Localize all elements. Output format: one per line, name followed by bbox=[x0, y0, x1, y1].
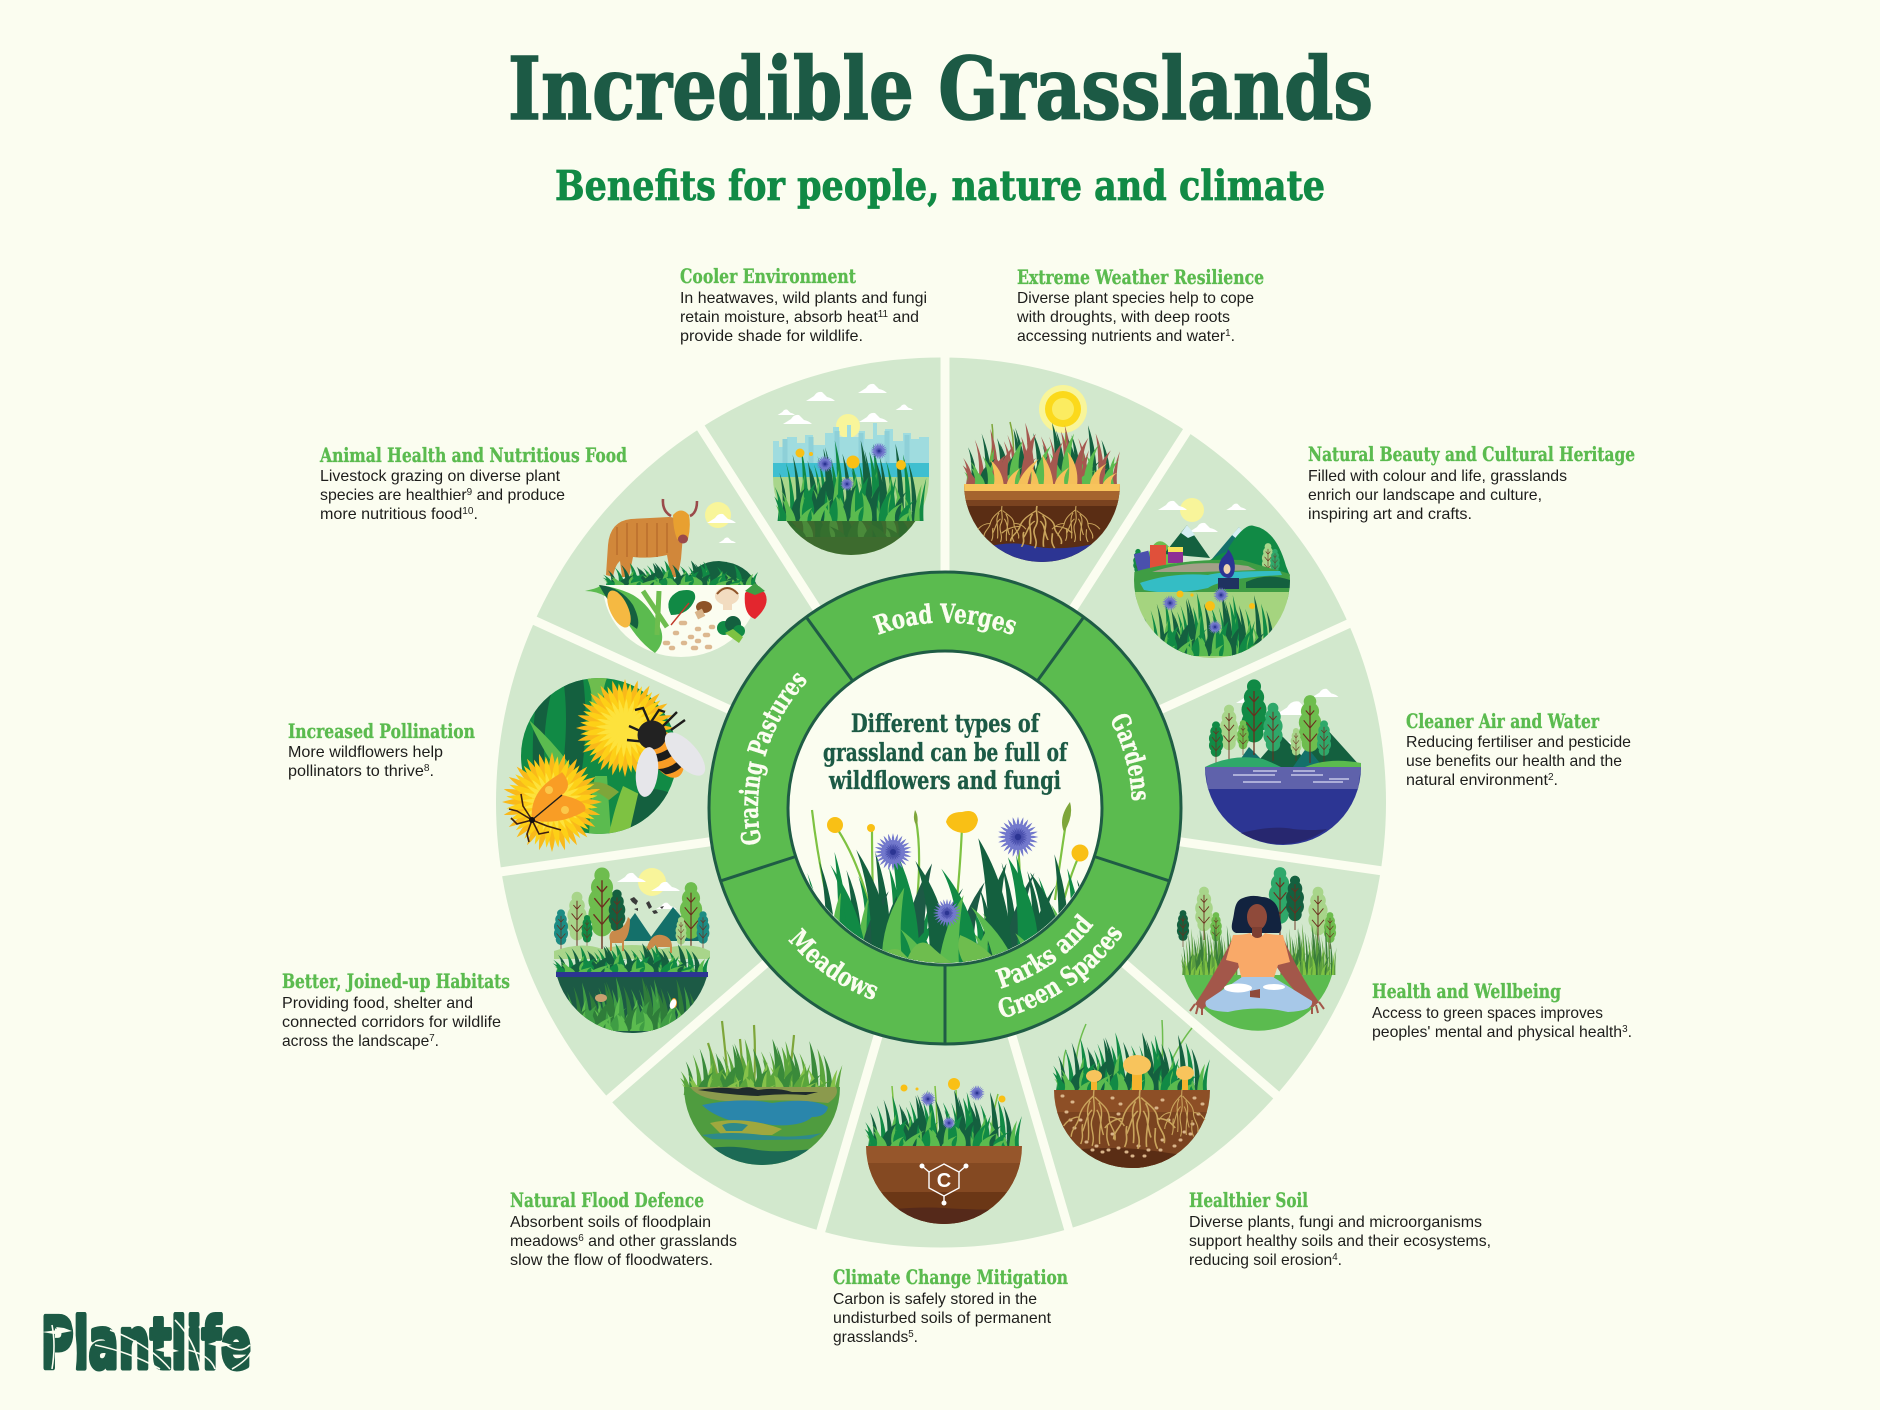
ring label: parks and green spaces: Parks and bbox=[994, 913, 1094, 989]
text: climate change mitigation: undisturbed soils of permanent bbox=[833, 1310, 1052, 1327]
text: increased pollination bbox=[288, 719, 475, 780]
text: healthier soil: Diverse plants, fungi and microorganisms bbox=[1189, 1214, 1482, 1231]
text: extreme weather resilience: . bbox=[1231, 328, 1235, 345]
text: better joined-up habitats: Providing food, shelter and bbox=[282, 995, 473, 1012]
text: natural beauty and cultural heritage: Filled with colour and life, grasslands bbox=[1308, 468, 1567, 485]
text: health and wellbeing: Access to green spaces improves bbox=[1372, 1005, 1603, 1022]
title: Incredible Grasslands bbox=[508, 39, 1373, 140]
text: natural flood defence: Absorbent soils of floodplain bbox=[510, 1214, 711, 1231]
text: healthier soil: . bbox=[1338, 1252, 1342, 1269]
text: extreme weather resilience: Extreme Weather Resilience bbox=[1017, 265, 1264, 289]
text: climate change mitigation: 5 bbox=[908, 1329, 914, 1340]
icon: extreme weather resilience bbox=[963, 385, 1120, 564]
text: increased pollination: Increased Pollination bbox=[288, 719, 475, 743]
icon: natural flood defence bbox=[680, 1021, 842, 1167]
text: better joined-up habitats bbox=[282, 969, 510, 1050]
text: animal health and nutritious food: 9 bbox=[467, 487, 473, 498]
centre text: grassland can be full of bbox=[823, 738, 1069, 767]
text: natural beauty and cultural heritage: inspiring art and crafts. bbox=[1308, 506, 1472, 523]
text: extreme weather resilience: accessing nutrients and water bbox=[1017, 328, 1229, 345]
wheel: outer benefit wedges bbox=[480, 338, 1410, 1259]
text: health and wellbeing: . bbox=[1628, 1024, 1632, 1041]
text: cleaner air and water: natural environment bbox=[1406, 772, 1547, 789]
text: cleaner air and water: 2 bbox=[1548, 772, 1554, 783]
icon: natural beauty and cultural heritage bbox=[1133, 498, 1290, 662]
text: better joined-up habitats: across the landscape bbox=[282, 1033, 433, 1050]
text: animal health and nutritious food: and produce bbox=[472, 487, 565, 504]
text: better joined-up habitats: connected corridors for wildlife bbox=[282, 1014, 501, 1031]
text: increased pollination: . bbox=[429, 763, 434, 780]
text: animal health and nutritious food: Animal Health and Nutritious Food bbox=[319, 443, 627, 467]
text: natural flood defence: and other grasslands bbox=[584, 1233, 737, 1250]
text: animal health and nutritious food bbox=[319, 443, 627, 523]
text: natural beauty and cultural heritage bbox=[1308, 442, 1635, 523]
text: natural flood defence: slow the flow of floodwaters. bbox=[510, 1252, 713, 1269]
text: cooler environment: 11 bbox=[878, 309, 889, 320]
centre ring: grassland types bbox=[708, 570, 1182, 1046]
text: animal health and nutritious food: more nutritious food bbox=[320, 506, 461, 523]
text: extreme weather resilience: with droughts, with deep roots bbox=[1016, 309, 1230, 326]
centre text: Different types of bbox=[851, 709, 1041, 738]
text: extreme weather resilience: Diverse plant species help to cope bbox=[1017, 290, 1254, 307]
text: health and wellbeing: Health and Wellbeing bbox=[1372, 979, 1561, 1003]
text: cleaner air and water: . bbox=[1554, 772, 1558, 789]
text: healthier soil: 4 bbox=[1332, 1252, 1338, 1263]
text: animal health and nutritious food: 10 bbox=[462, 506, 474, 517]
centre circle with plants bbox=[786, 651, 1107, 975]
logo: Plantlife: Plantlife bbox=[41, 1303, 251, 1385]
text: climate change mitigation: Climate Change Mitigation bbox=[833, 1265, 1068, 1289]
text: natural beauty and cultural heritage: Natural Beauty and Cultural Heritage bbox=[1308, 442, 1635, 466]
text: better joined-up habitats: . bbox=[435, 1033, 439, 1050]
subtitle: Benefits for people, nature and climate bbox=[555, 162, 1325, 210]
text: cooler environment bbox=[680, 264, 927, 345]
text: animal health and nutritious food: Livestock grazing on diverse plant bbox=[320, 468, 561, 485]
logo: Plantlife bbox=[41, 1303, 252, 1385]
text: healthier soil: support healthy soils and their ecosystems, bbox=[1189, 1233, 1491, 1250]
text: increased pollination: 8 bbox=[424, 763, 430, 774]
text: health and wellbeing bbox=[1372, 979, 1632, 1041]
text: health and wellbeing: 3 bbox=[1622, 1024, 1628, 1035]
text: cleaner air and water bbox=[1406, 709, 1631, 789]
centre text bbox=[823, 709, 1069, 795]
icon: climate change mitigation: C bbox=[937, 1170, 951, 1192]
text: cleaner air and water: use benefits our health and the bbox=[1406, 753, 1622, 770]
text: natural beauty and cultural heritage: enrich our landscape and culture, bbox=[1308, 487, 1542, 504]
text: natural flood defence: meadows bbox=[510, 1233, 578, 1250]
text: increased pollination: pollinators to thrive bbox=[288, 763, 422, 780]
text: extreme weather resilience: 1 bbox=[1225, 328, 1231, 339]
text: natural flood defence: Natural Flood Defence bbox=[510, 1188, 704, 1212]
ring label: green spaces: Green Spaces bbox=[998, 926, 1122, 1018]
text: climate change mitigation bbox=[833, 1265, 1068, 1346]
text: cleaner air and water: Cleaner Air and Water bbox=[1406, 709, 1599, 733]
icon: health and wellbeing bbox=[1177, 867, 1336, 1031]
centre text: wildflowers and fungi bbox=[828, 766, 1061, 795]
text: climate change mitigation: Carbon is safely stored in the bbox=[833, 1291, 1037, 1308]
centre wildflower illustration bbox=[807, 802, 1080, 963]
icon: animal health and nutritious food bbox=[585, 499, 767, 657]
text: increased pollination: More wildflowers help bbox=[288, 744, 443, 761]
icon: cooler environment bbox=[773, 384, 929, 555]
text: better joined-up habitats: 7 bbox=[429, 1033, 435, 1044]
text: cooler environment: Cooler Environment bbox=[680, 264, 857, 288]
text: healthier soil: Healthier Soil bbox=[1189, 1188, 1308, 1212]
icon: cleaner air and water bbox=[1205, 679, 1361, 845]
icon: climate change mitigation bbox=[865, 1078, 1022, 1226]
ring label: road verges: Road Verges bbox=[872, 603, 1016, 635]
icon: healthier soil bbox=[1053, 1020, 1210, 1170]
text: healthier soil bbox=[1189, 1188, 1491, 1269]
text: cooler environment: provide shade for wildlife. bbox=[680, 328, 863, 345]
text: natural flood defence: 6 bbox=[578, 1233, 584, 1244]
icon: increased pollination bbox=[502, 678, 705, 852]
text: natural flood defence bbox=[510, 1188, 737, 1269]
icon: better joined-up habitats bbox=[553, 868, 710, 1033]
text: health and wellbeing: peoples' mental and physical health bbox=[1372, 1024, 1625, 1041]
ring label: gardens: Gardens bbox=[1112, 714, 1146, 800]
text: healthier soil: reducing soil erosion bbox=[1189, 1252, 1336, 1269]
text: animal health and nutritious food: species are healthier bbox=[320, 487, 468, 504]
text: cleaner air and water: Reducing fertiliser and pesticide bbox=[1406, 734, 1631, 751]
text: climate change mitigation: . bbox=[914, 1329, 918, 1346]
text: better joined-up habitats: Better, Joined-up Habitats bbox=[282, 969, 510, 993]
text: extreme weather resilience bbox=[1016, 265, 1264, 345]
text: cooler environment: and bbox=[888, 309, 919, 326]
text: cooler environment: In heatwaves, wild plants and fungi bbox=[680, 290, 927, 307]
ring label: meadows: Meadows bbox=[788, 927, 878, 1000]
text: animal health and nutritious food: . bbox=[474, 506, 478, 523]
text: climate change mitigation: grasslands bbox=[833, 1329, 910, 1346]
text: cooler environment: retain moisture, absorb heat bbox=[680, 309, 879, 326]
ring label: grazing pastures: Grazing Pastures bbox=[738, 672, 806, 845]
